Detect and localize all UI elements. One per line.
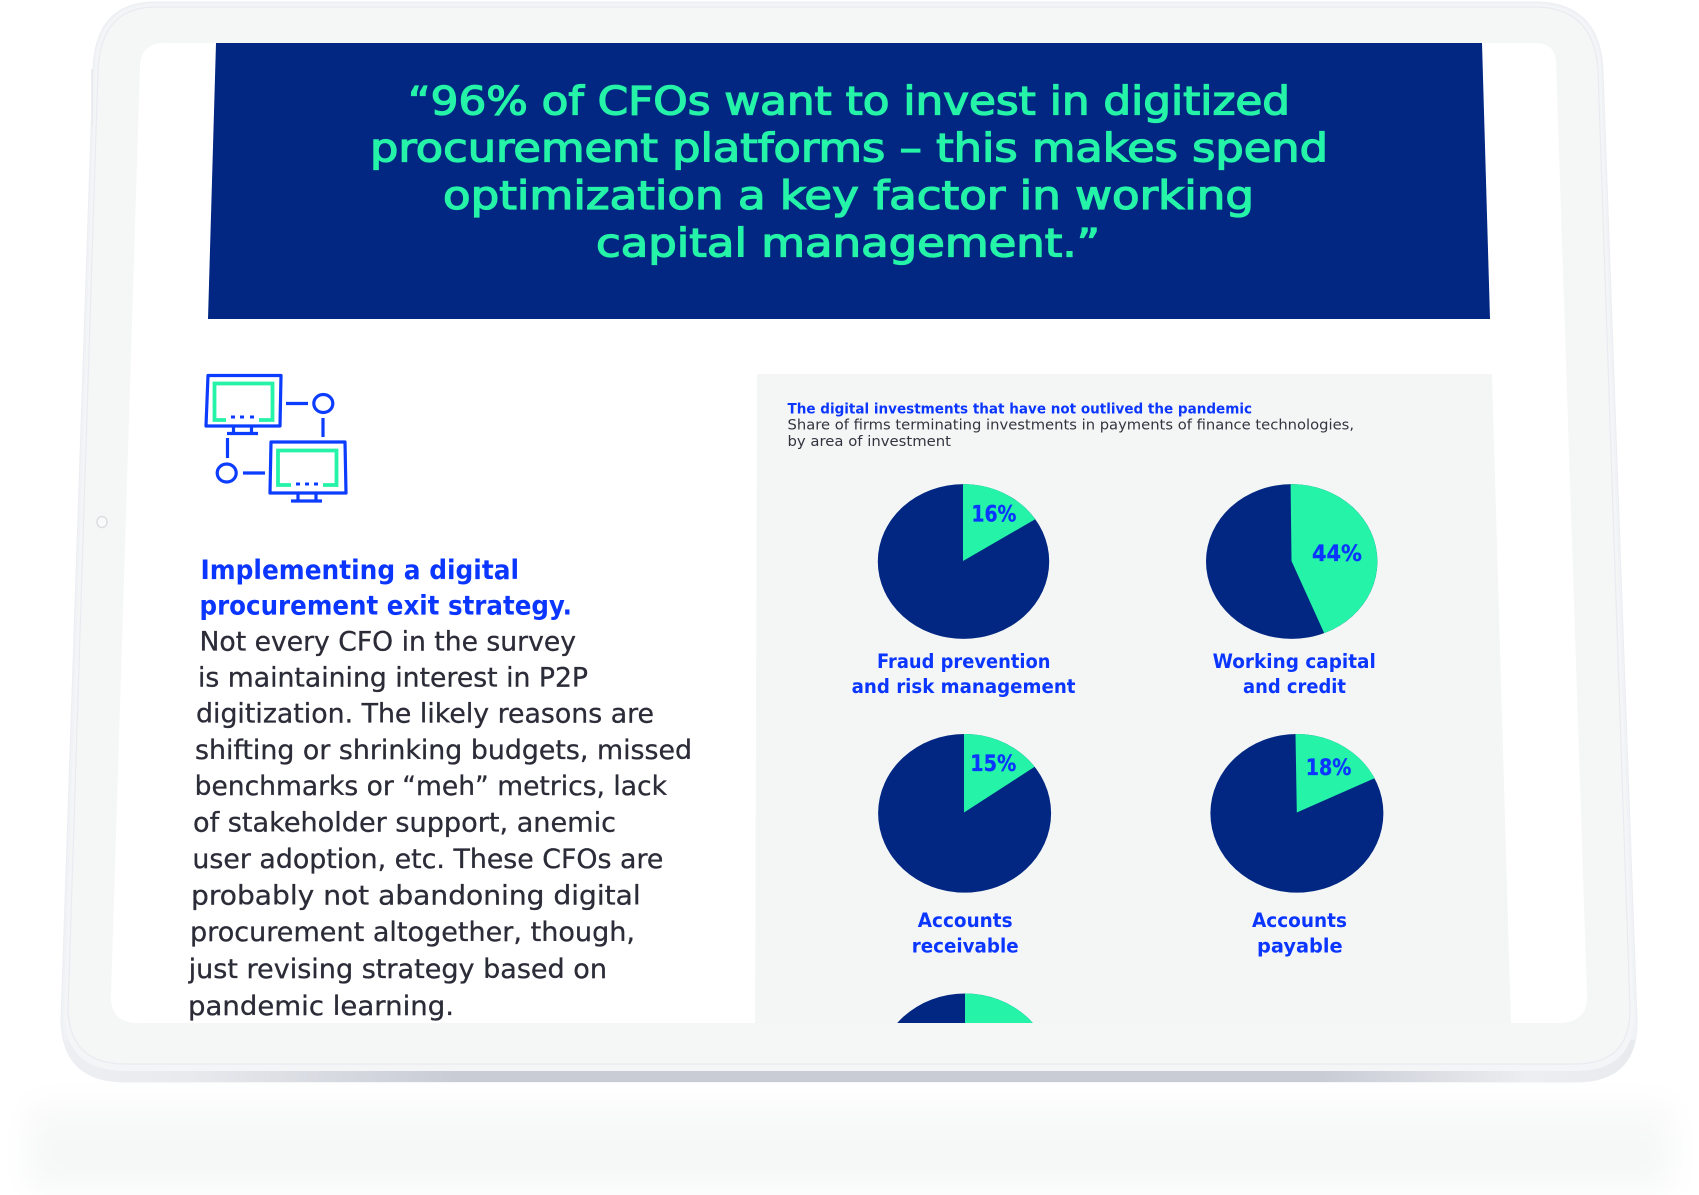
banner quote text: procurement platforms – this makes spend	[370, 126, 1328, 172]
pie: working capital 44%	[1206, 484, 1377, 698]
banner quote text: capital management.”	[596, 222, 1100, 266]
pie: accounts payable 18%: payable	[1257, 934, 1343, 958]
tablet screen	[111, 43, 1587, 1023]
pie: working capital 44%: and credit	[1243, 675, 1346, 698]
chart title	[788, 402, 1354, 450]
screen content	[188, 43, 1511, 1023]
body paragraph	[188, 626, 692, 1022]
panel: chart	[755, 374, 1511, 1023]
body paragraph: benchmarks or “meh” metrics, lack	[195, 771, 667, 802]
icon: networked monitors	[206, 376, 346, 501]
body paragraph: pandemic learning.	[188, 991, 454, 1022]
body paragraph: of stakeholder support, anemic	[193, 808, 616, 838]
pie: working capital 44%: 44%	[1312, 542, 1362, 567]
pie: accounts receivable 15%: receivable	[912, 934, 1019, 958]
section heading	[200, 555, 572, 622]
device shadow	[28, 1100, 1672, 1190]
chart title: by area of investment	[788, 434, 952, 450]
pie: accounts receivable 15%: Accounts	[918, 909, 1013, 932]
pie: working capital 44%: Working capital	[1213, 650, 1376, 673]
banner quote text: “96% of CFOs want to invest in digitized	[408, 80, 1290, 124]
pie: accounts receivable 15%: 15%	[970, 752, 1016, 777]
quote banner	[208, 43, 1490, 319]
chart title: Share of firms terminating investments in payments of finance technologies,	[788, 418, 1354, 434]
pie: accounts payable 18%	[1210, 734, 1383, 958]
pie: accounts receivable 15%	[878, 734, 1051, 958]
chart title: The digital investments that have not outlived the pandemic	[788, 402, 1252, 418]
section heading: procurement exit strategy.	[200, 590, 572, 622]
body paragraph: shifting or shrinking budgets, missed	[195, 735, 692, 766]
banner quote text: optimization a key factor in working	[443, 174, 1254, 219]
pie: fraud prevention 16%: and risk management	[852, 675, 1076, 698]
body paragraph: just revising strategy based on	[188, 954, 607, 985]
body paragraph: user adoption, etc. These CFOs are	[192, 844, 663, 875]
pie: fraud prevention 16%: Fraud prevention	[877, 650, 1050, 673]
body paragraph: probably not abandoning digital	[191, 880, 641, 912]
pie: accounts payable 18%: 18%	[1306, 756, 1351, 781]
body paragraph: procurement altogether, though,	[190, 917, 635, 948]
pie: fraud prevention 16%: 16%	[971, 502, 1016, 528]
body paragraph: Not every CFO in the survey	[200, 626, 576, 658]
pie: fraud prevention 16%	[852, 484, 1076, 698]
body paragraph: is maintaining interest in P2P	[198, 662, 588, 694]
body paragraph: digitization. The likely reasons are	[196, 698, 654, 730]
body text block	[188, 555, 692, 1022]
banner quote text	[370, 80, 1328, 266]
pie: fifth chart, cut off	[897, 994, 1033, 1023]
pie: accounts payable 18%: Accounts	[1252, 909, 1347, 932]
section heading: Implementing a digital	[200, 555, 519, 586]
